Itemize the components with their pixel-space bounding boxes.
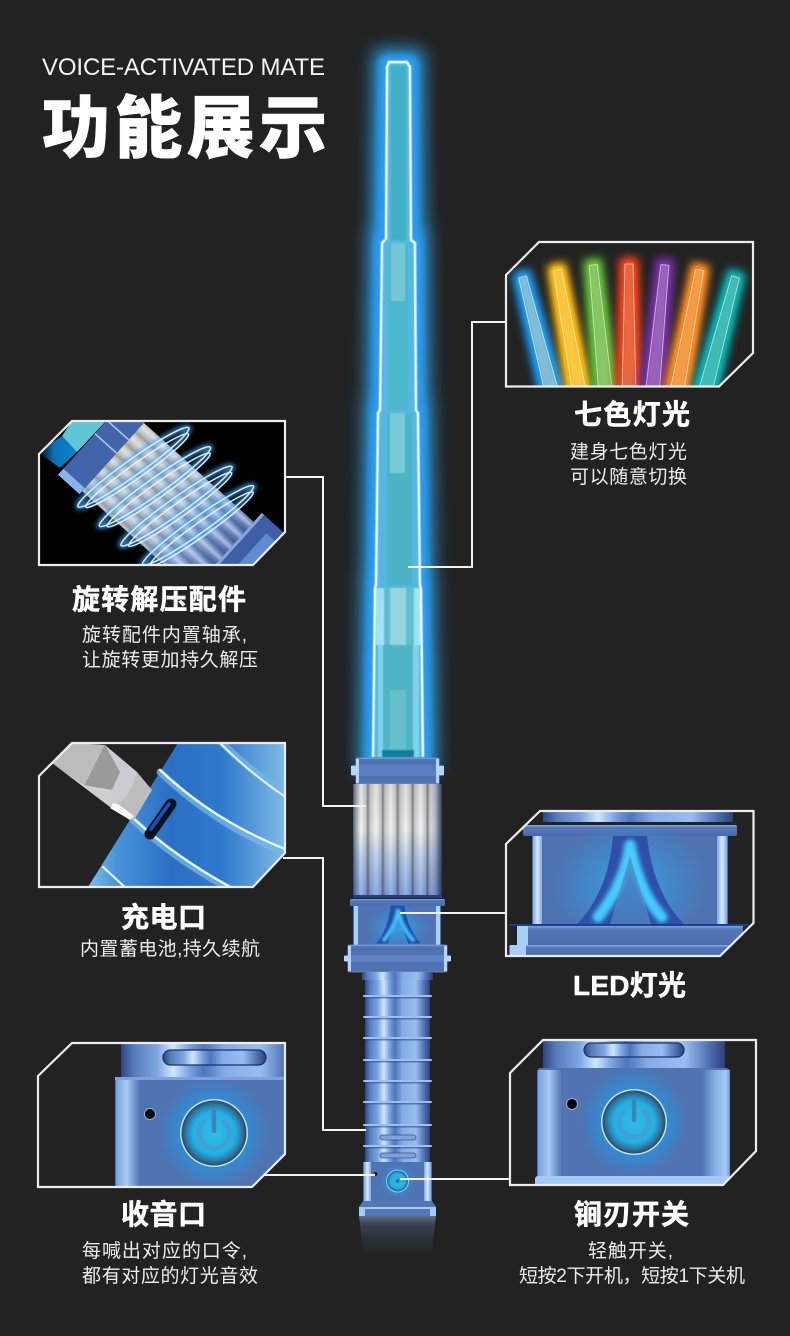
blade bbox=[373, 62, 423, 760]
text: switch: 轻触开关, bbox=[588, 1240, 673, 1262]
connector: microphone to hole bbox=[263, 1174, 375, 1176]
text: mic: 每喊出对应的口令, bbox=[82, 1240, 247, 1262]
text: switch: 短按2下开机，短按1下关机 bbox=[519, 1265, 745, 1287]
power button bbox=[586, 1074, 682, 1170]
fluted rotating grip bbox=[353, 784, 442, 898]
base reflection bbox=[359, 1216, 436, 1257]
spinning rings bbox=[72, 422, 260, 564]
label: mic heading: 收音口 bbox=[121, 1199, 206, 1230]
power button bbox=[164, 1082, 264, 1184]
label: LED heading: LED灯光 bbox=[573, 970, 686, 1001]
subtitle: VOICE-ACTIVATED MATE bbox=[42, 54, 325, 81]
connector: rotating part to grip bbox=[285, 477, 366, 806]
purple stick bbox=[643, 262, 674, 398]
text: mic: 都有对应的灯光音效 bbox=[82, 1265, 258, 1287]
red stick bbox=[620, 262, 638, 397]
LED section bbox=[350, 899, 445, 950]
panel: charging port bbox=[39, 743, 290, 890]
text: seven colour light: 可以随意切换 bbox=[570, 466, 687, 488]
title: 功能展示 bbox=[42, 91, 327, 167]
hilt lower collar bbox=[344, 945, 451, 972]
handle close-up bbox=[88, 743, 285, 887]
yellow stick bbox=[548, 266, 590, 402]
panel: LED light bbox=[506, 811, 754, 957]
label: charging heading: 充电口 bbox=[121, 902, 206, 933]
text: charging: 内置蓄电池,持久续航 bbox=[80, 938, 260, 960]
hilt base bbox=[359, 1201, 436, 1216]
panel: seven colour light bbox=[506, 242, 753, 403]
orange stick bbox=[666, 266, 709, 402]
blue stick bbox=[513, 273, 563, 403]
USB-C slot bbox=[150, 804, 171, 834]
connector: colours to blade bbox=[408, 322, 506, 567]
connector: switch to button bbox=[400, 1178, 510, 1180]
text: seven colour light: 建身七色灯光 bbox=[570, 441, 687, 463]
USB cable bbox=[52, 743, 152, 820]
connector: LED panel to hilt bbox=[400, 912, 506, 914]
teal stick bbox=[694, 273, 745, 403]
handle bbox=[362, 972, 433, 1163]
label: seven colour light heading: 七色灯光 bbox=[574, 399, 690, 430]
panel: microphone bbox=[38, 1043, 301, 1190]
panel: rotating fidget part bbox=[38, 420, 286, 566]
text: rotating part: 让旋转更加持久解压 bbox=[82, 649, 258, 671]
switch box bbox=[363, 1162, 432, 1203]
lightsaber bbox=[344, 62, 451, 1257]
label: switch heading: 锏刃开关 bbox=[574, 1199, 689, 1230]
text: rotating part: 旋转配件内置轴承, bbox=[82, 624, 247, 646]
connector: charging port to handle bbox=[283, 858, 366, 1130]
green stick bbox=[584, 262, 615, 398]
hilt top collar bbox=[351, 758, 444, 784]
label: rotating heading: 旋转解压配件 bbox=[72, 584, 246, 615]
panel: power switch bbox=[510, 1040, 756, 1186]
blade inner columns bbox=[376, 66, 421, 757]
